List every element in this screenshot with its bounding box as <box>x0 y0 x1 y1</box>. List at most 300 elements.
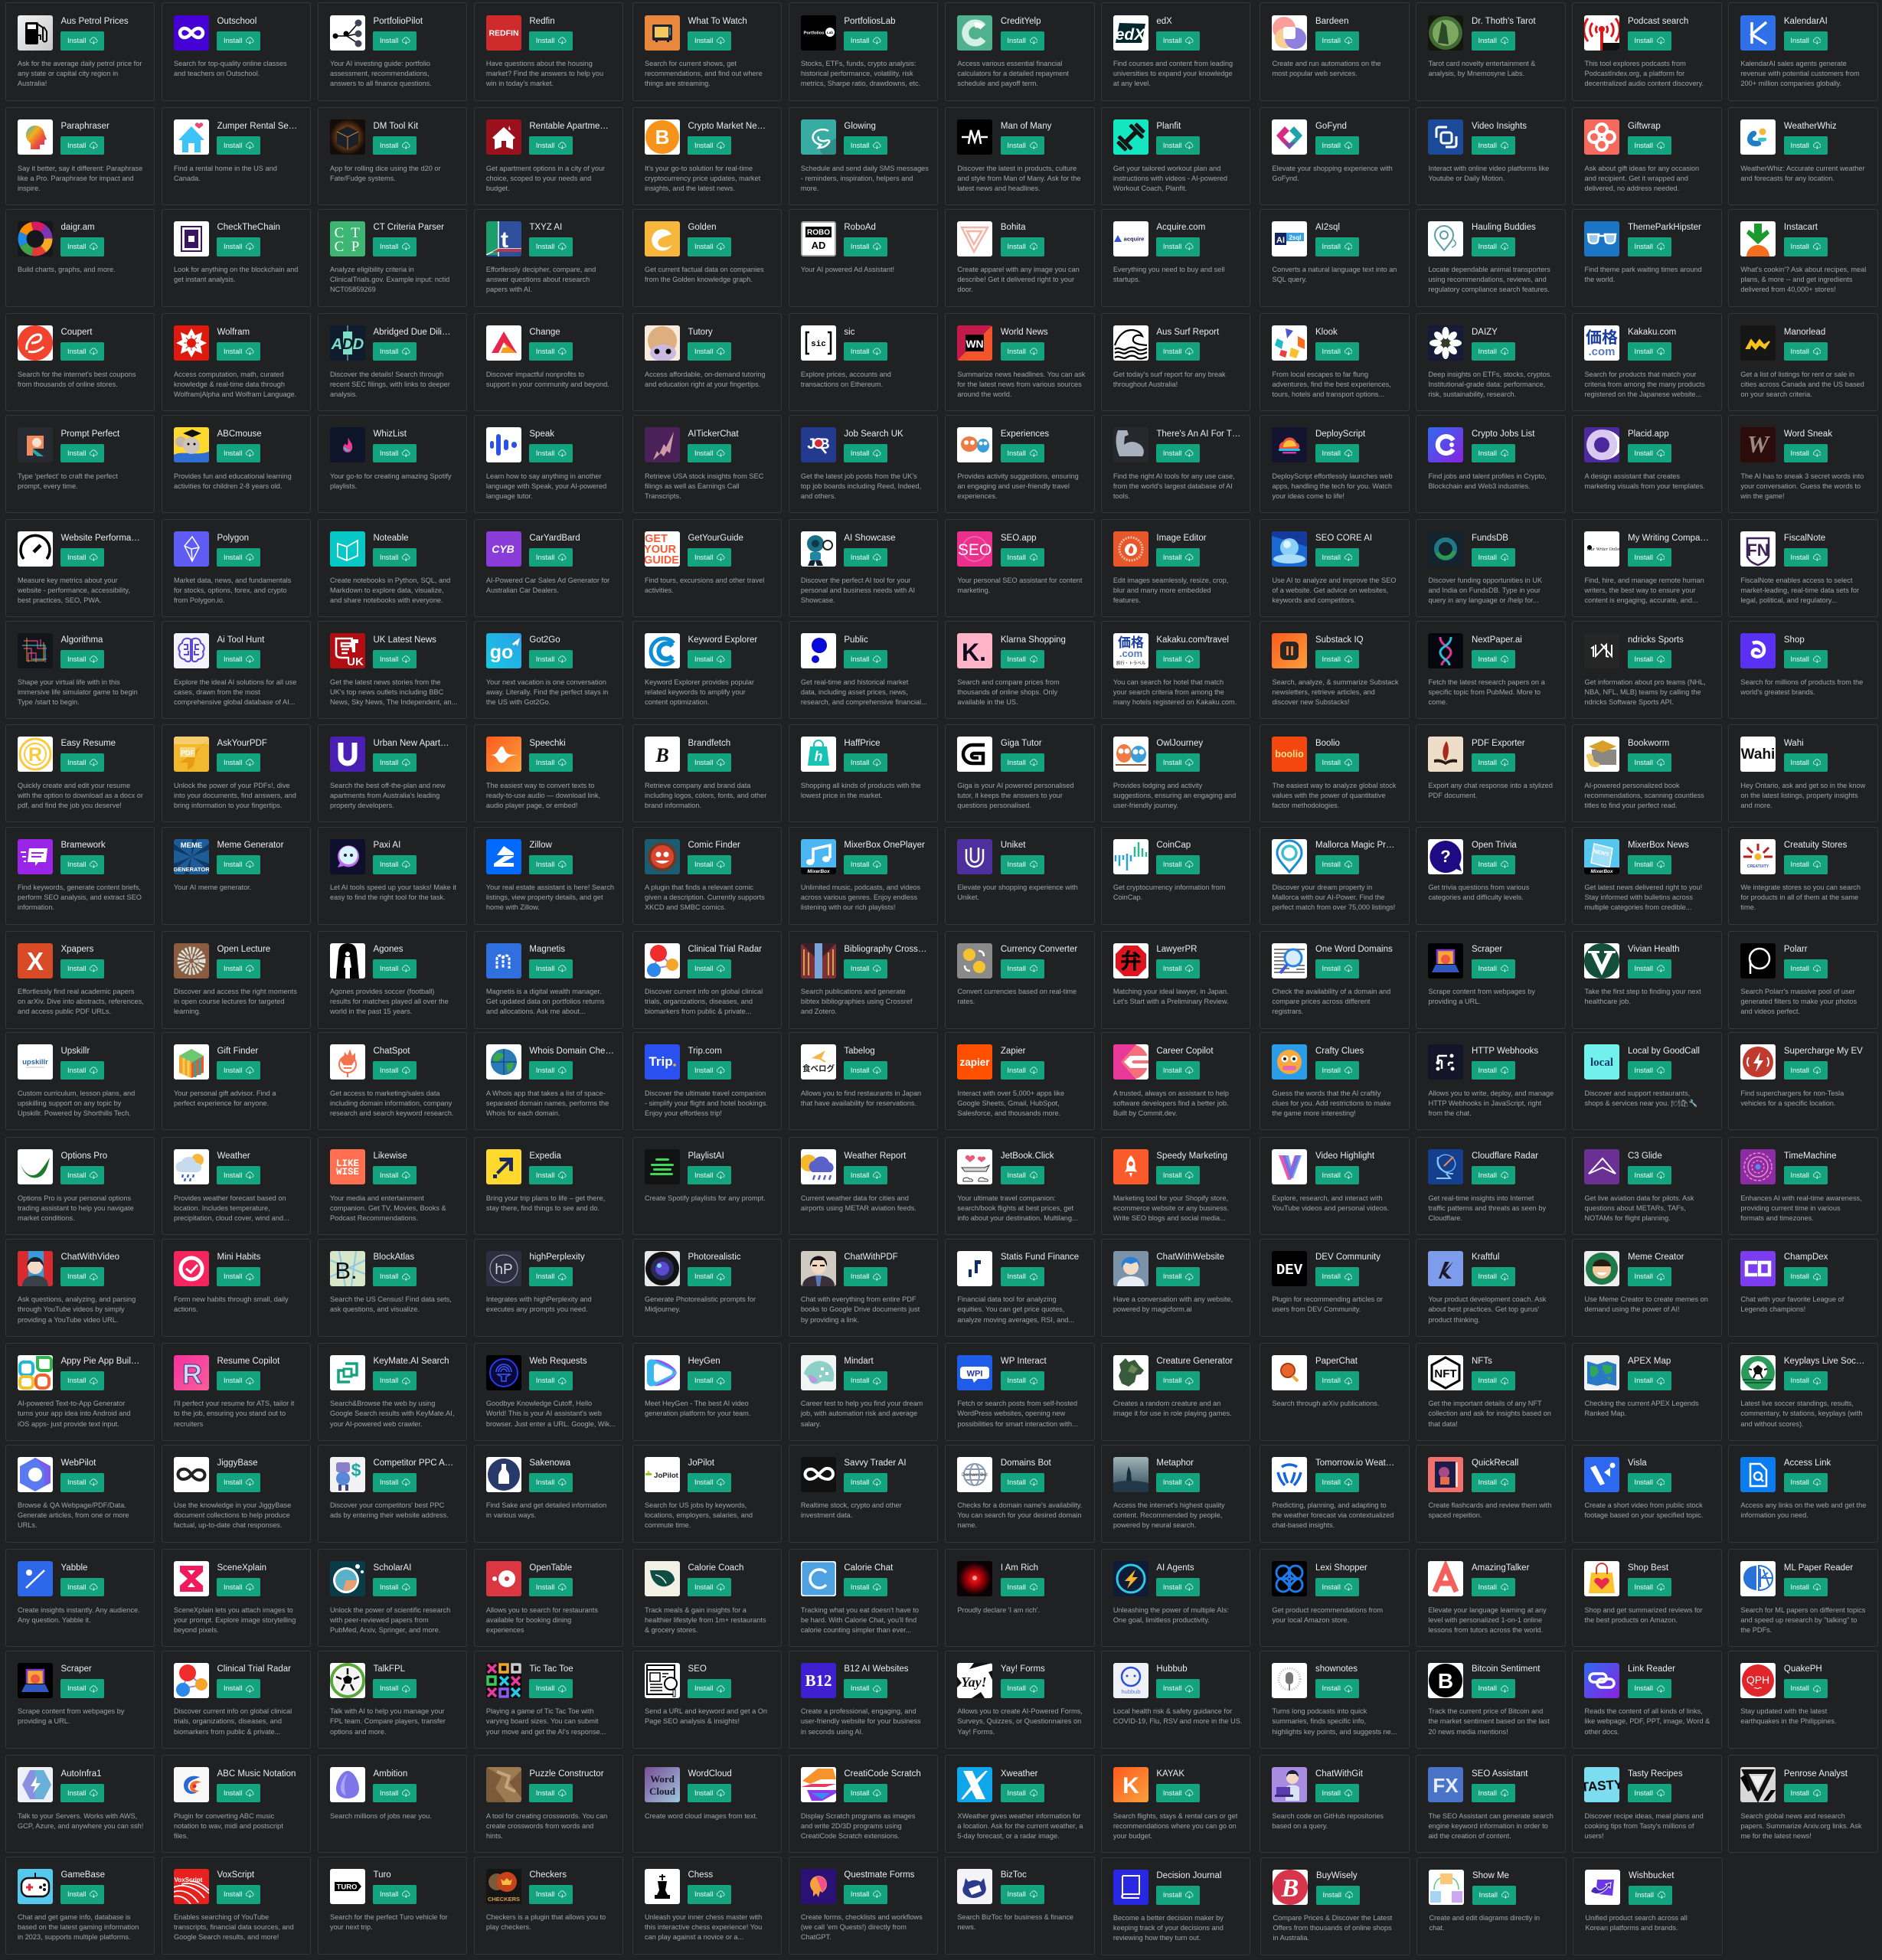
install button: Install <box>380 242 398 250</box>
description <box>801 164 929 192</box>
description <box>1428 472 1547 492</box>
icon: Ai Tool Hunt <box>174 633 209 668</box>
install button: Install <box>536 1583 554 1591</box>
description: listening with our rich playlists! <box>801 903 895 911</box>
icon: Access Link <box>1740 1457 1776 1492</box>
card: Gift Finder <box>162 1032 311 1130</box>
description: Your media and entertainment <box>330 1194 424 1202</box>
icon: Hubbub <box>1113 1663 1148 1698</box>
description: Blockchain and Web3 industries. <box>1428 482 1531 490</box>
name: Klarna Shopping <box>1001 635 1066 645</box>
description: Reads the content of all kinds of links, <box>1584 1707 1703 1715</box>
icon: Kakaku.com: .com <box>1589 345 1616 358</box>
description: Discover and access the right moments <box>174 988 297 995</box>
install button: Install <box>1478 553 1497 561</box>
icon: KalendarAI <box>1740 15 1776 51</box>
install button: Install <box>1634 1583 1653 1591</box>
install button <box>373 31 417 51</box>
description: Generate articles, from one or more <box>18 1511 129 1519</box>
name: Web Requests <box>529 1357 587 1366</box>
card: DeployScript <box>1260 415 1410 513</box>
card: Trip.com <box>632 1032 782 1130</box>
description <box>645 60 763 87</box>
install button <box>1156 1371 1200 1390</box>
icon: Questmate Forms <box>801 1869 836 1904</box>
install button: Install <box>1478 1376 1497 1384</box>
name: Hubbub <box>1156 1664 1188 1674</box>
description: Find tours, excursions and other travel <box>645 576 764 583</box>
description: Custom curriculum, lesson plans, and <box>18 1089 135 1096</box>
description: earthquakes in the Philippines. <box>1740 1717 1837 1725</box>
card: Show Me <box>1416 1857 1567 1955</box>
card: ChampDex <box>1728 1239 1878 1337</box>
install button <box>1784 548 1828 567</box>
description: pdf, and find the job you deserve! <box>18 802 122 809</box>
icon: Open Lecture <box>174 943 209 978</box>
description: of a website. Get advice on websites, <box>1272 586 1388 594</box>
card: Podcast search <box>1572 2 1722 101</box>
name: CreatiCode Scratch <box>844 1769 921 1779</box>
description: World! This is your AI assistant's web <box>486 1410 602 1417</box>
icon: RoboAd: AD <box>811 240 825 251</box>
icon: Klarna Shopping <box>957 633 992 668</box>
description <box>957 369 1085 400</box>
description: Get the latest news stories from the <box>330 678 441 686</box>
name: Domains Bot <box>1001 1459 1051 1468</box>
description: traffic patterns and threats as seen by <box>1428 1204 1546 1212</box>
icon: Sakenowa <box>486 1457 521 1492</box>
description <box>1584 60 1704 87</box>
description: Chat and get game info, database is <box>18 1913 131 1921</box>
description: the PDFs. <box>1740 1626 1772 1634</box>
icon: Manorlead <box>1740 325 1776 361</box>
description: and Zotero. <box>801 1008 837 1015</box>
icon: Link Reader <box>1584 1663 1619 1698</box>
description: spaced repeition. <box>1428 1511 1482 1519</box>
description: Access various essential financial <box>957 60 1062 67</box>
description <box>18 1399 131 1429</box>
card: HTTP Webhooks <box>1416 1032 1566 1130</box>
card: Photorealistic <box>632 1239 782 1337</box>
description: CreatiCode Scratch extensions. <box>801 1832 900 1840</box>
install button <box>1315 342 1359 361</box>
description: analysis. <box>330 390 358 398</box>
icon: BlockAtlas <box>330 1251 365 1286</box>
icon: Mini Habits <box>174 1251 209 1286</box>
icon: QuakePH <box>1740 1663 1776 1698</box>
description <box>1428 781 1553 801</box>
install button <box>1472 136 1515 155</box>
name: UK Latest News <box>373 635 436 645</box>
description: and videos perfect. <box>1740 1008 1800 1015</box>
card: SEO <box>632 1651 782 1749</box>
install button <box>844 136 887 155</box>
description: historical performance, volatility, risk <box>801 70 913 77</box>
card: Public <box>789 621 938 719</box>
install button: Install <box>694 1788 713 1797</box>
description <box>1428 677 1545 707</box>
description: perform SEO analysis, and extract SEO <box>18 893 142 901</box>
description: Canada. <box>174 175 201 182</box>
install button: Install <box>536 36 554 44</box>
icon: highPerplexity <box>486 1251 521 1286</box>
install button <box>373 136 417 155</box>
name: daigr.am <box>60 223 95 232</box>
name: Yay! Forms <box>1001 1664 1045 1674</box>
icon: CoinCap <box>1113 839 1148 874</box>
install button: Install <box>1322 964 1341 972</box>
install button <box>688 855 731 874</box>
card: AmazingTalker <box>1416 1549 1566 1647</box>
install button: Install <box>1790 1478 1809 1486</box>
description: One goal, limitless productivity. <box>1113 1616 1210 1624</box>
description: Your AI investing guide: portfolio <box>330 60 430 67</box>
card: Weather <box>162 1137 311 1235</box>
description: and speed up research by "talking" to <box>1740 1616 1857 1624</box>
description: your budget. <box>1113 1832 1152 1840</box>
install button: Install <box>1634 1684 1653 1692</box>
description: Your next vacation is one conversation <box>486 678 606 686</box>
description <box>18 369 136 390</box>
name: Podcast search <box>1628 17 1688 26</box>
install button: Install <box>67 758 86 766</box>
install button <box>1628 1371 1671 1390</box>
description: Get information about pro teams (NHL, <box>1584 678 1706 686</box>
card: Visla <box>1572 1444 1722 1543</box>
install button: Install <box>851 141 869 149</box>
icon: Gift Finder <box>174 1044 209 1080</box>
install button: Install <box>1634 449 1653 457</box>
description <box>1113 987 1229 1007</box>
name: Sakenowa <box>529 1459 570 1468</box>
icon: Calorie Chat <box>801 1561 836 1596</box>
install button: Install <box>1478 758 1497 766</box>
install button: Install <box>224 141 242 149</box>
description: image it for use in role playing games. <box>1113 1410 1232 1417</box>
install button: Install <box>1322 553 1341 561</box>
description: using recommendations, reviews, and <box>1428 276 1547 283</box>
description: best practices, SEO, PWA. <box>18 596 101 604</box>
card: Hubbub <box>1101 1651 1250 1749</box>
install button <box>1628 753 1671 772</box>
icon: Yay! Forms: Yay! <box>962 1674 987 1690</box>
icon: PortfoliosLab: Lab <box>827 31 833 34</box>
install button: Install <box>851 242 869 250</box>
icon: Tabelog: 食べログ <box>802 1063 835 1073</box>
description: given a description. Currently supports <box>645 893 765 901</box>
description: You can search for hotel that match <box>1113 678 1224 686</box>
card: Competitor PPC Ads <box>318 1444 467 1543</box>
description: FiscalNote enables access to select <box>1740 576 1852 583</box>
name: Algorithma <box>60 635 103 645</box>
install button: Install <box>694 347 713 355</box>
install button <box>688 1578 731 1596</box>
install button: Install <box>1790 1376 1809 1384</box>
install button <box>1784 1578 1828 1596</box>
icon: Checkers: CHECKERS <box>488 1896 520 1903</box>
description: describe! Get it delivered right to your <box>957 276 1074 283</box>
description: Enjoy your effortless trip! <box>645 1109 722 1117</box>
install button: Install <box>1163 1272 1181 1280</box>
install button <box>1156 237 1200 256</box>
description: content. Recommended by people, <box>1113 1511 1222 1519</box>
description: Provides weather forecast based on <box>174 1194 286 1202</box>
description: Find keywords, generate content briefs, <box>18 884 141 891</box>
description: language with Speak, your AI-powered <box>486 482 606 490</box>
install button <box>529 1166 573 1184</box>
icon: Scraper <box>1428 943 1463 978</box>
icon: Instacart <box>1740 221 1776 256</box>
name: Dr. Thoth's Tarot <box>1472 17 1536 26</box>
description: Let AI tools speed up your tasks! Make it <box>330 884 456 891</box>
name: Chess <box>688 1870 713 1880</box>
name: AI Showcase <box>844 534 896 543</box>
description <box>174 1501 291 1530</box>
description: beyond pixels. <box>174 1626 219 1634</box>
description: including domain information, company <box>330 1099 452 1107</box>
install button <box>60 342 104 361</box>
description <box>18 1295 136 1325</box>
card: Speedy Marketing <box>1101 1137 1250 1235</box>
description <box>1740 1811 1862 1841</box>
install button: Install <box>1790 242 1809 250</box>
description <box>1584 265 1702 285</box>
description: Search BizToc for business & finance <box>957 1913 1073 1921</box>
icon: Domains Bot <box>957 1457 992 1492</box>
description: Discover impactful nonprofits to <box>486 371 584 378</box>
description: Convert currencies based on real-time <box>957 988 1077 995</box>
description: Create forms, checklists and workflows <box>801 1913 923 1921</box>
description: Salesforce, and thousands more. <box>957 1109 1060 1117</box>
install button <box>373 1267 417 1286</box>
name: Website Performa… <box>60 534 140 543</box>
icon: Statis Fund Finance <box>957 1251 992 1286</box>
name: Rentable Apartme… <box>529 122 609 131</box>
description: Type /start to begin. <box>18 698 80 706</box>
icon: JoPilot <box>645 1457 680 1492</box>
name: Scraper <box>1472 945 1502 954</box>
name: My Writing Compa… <box>1628 534 1709 543</box>
icon: MixerBox News <box>1584 839 1619 874</box>
description <box>1272 1089 1391 1119</box>
description: Surveys, Quizzes, or Questionnaires on <box>957 1717 1081 1725</box>
description <box>486 1605 598 1635</box>
description: market? Find the answers to help you <box>486 70 603 77</box>
card: Bardeen <box>1260 2 1410 101</box>
description: chat-based insights. <box>1272 1521 1335 1529</box>
card: TimeMachine <box>1728 1137 1878 1235</box>
description: your prompt. Explore image storytelling <box>174 1616 296 1624</box>
install button: Install <box>1007 449 1026 457</box>
name: Ambition <box>373 1769 407 1779</box>
card: RoboAd <box>789 209 938 307</box>
description <box>174 576 291 606</box>
install button <box>217 1267 260 1286</box>
install button: Install <box>851 1171 869 1179</box>
install button: Install <box>1634 242 1653 250</box>
card: JetBook.Click <box>945 1137 1095 1235</box>
name: Competitor PPC A… <box>373 1459 453 1468</box>
description: come. <box>1428 698 1448 706</box>
install button: Install <box>1478 347 1497 355</box>
icon: Puzzle Constructor <box>486 1767 521 1802</box>
install button: Install <box>536 242 554 250</box>
description: Access affordable, on-demand tutoring <box>645 371 766 378</box>
install button: Install <box>851 1788 869 1797</box>
icon: Shop Best <box>1584 1561 1619 1596</box>
install button <box>1628 444 1671 462</box>
name: Job Search UK <box>844 430 903 439</box>
description: play checkers. <box>486 1923 531 1931</box>
description <box>1113 164 1227 192</box>
install button <box>217 1371 260 1390</box>
description: Create word cloud images from text. <box>645 1811 758 1819</box>
install button <box>60 1578 104 1596</box>
description: Export any chat response into a stylized <box>1428 781 1553 789</box>
description: Search millions of jobs near you. <box>330 1811 432 1819</box>
description <box>1584 987 1701 1007</box>
icon: Kakaku.com/travel: 価格 <box>1118 635 1144 650</box>
card: Abridged Due Diligence <box>318 313 467 411</box>
icon: Polygon <box>174 531 209 567</box>
card: Appy Pie App Builder <box>5 1343 155 1441</box>
description: Quickly create and edit your resume <box>18 781 130 789</box>
card: GameBase <box>5 1857 155 1955</box>
install button: Install <box>851 347 869 355</box>
card: Placid.app <box>1572 415 1722 513</box>
name: Metaphor <box>1156 1459 1194 1468</box>
name: Public <box>844 635 868 645</box>
description: rates. <box>957 998 975 1005</box>
name: ABCmouse <box>217 430 262 439</box>
description: AI-powered personalized book <box>1584 781 1680 789</box>
install button <box>1784 1061 1828 1080</box>
description <box>330 164 441 182</box>
description <box>174 1605 296 1635</box>
card: Website Performance <box>5 519 155 617</box>
description: Search for current shows, get <box>645 60 737 67</box>
description: Shape your virtual life with in this <box>18 678 120 686</box>
description: time. <box>1740 903 1756 911</box>
icon: Bookworm <box>1584 737 1619 772</box>
description <box>174 987 297 1018</box>
name: AskYourPDF <box>217 739 267 748</box>
install button: Install <box>851 860 869 868</box>
install button: Install <box>1790 1171 1809 1179</box>
icon: Supercharge My EV <box>1740 1044 1776 1080</box>
description: Search for products that match your <box>1584 371 1697 378</box>
card: CreatiCode Scratch <box>789 1755 938 1853</box>
icon: Website Performance <box>18 531 53 567</box>
description <box>645 472 763 501</box>
description: PubMed, Arxiv, Springer, and more. <box>330 1626 440 1634</box>
card: Web Requests <box>474 1343 623 1441</box>
icon: ML Paper Reader <box>1740 1561 1776 1596</box>
install button <box>688 1679 731 1698</box>
install button <box>217 1679 260 1698</box>
card: ChatWithVideo <box>5 1239 155 1337</box>
icon: Speechki <box>486 737 521 772</box>
install button <box>1315 1061 1359 1080</box>
name: SEO Assistant <box>1472 1769 1528 1779</box>
description: Have questions about the housing <box>486 60 593 67</box>
install button: Install <box>380 1890 398 1898</box>
description <box>486 883 614 913</box>
description: reviewing how they turn out. <box>1113 1934 1201 1942</box>
icon: Turo: TURO <box>337 1883 357 1891</box>
description: summaries, finds specific info, <box>1272 1717 1366 1725</box>
card: Meme Creator <box>1572 1239 1722 1337</box>
description: hints. <box>486 1832 503 1840</box>
icon: I Am Rich <box>957 1561 992 1596</box>
icon: SEO.app: SEO <box>958 541 992 559</box>
description: Get live aviation data for pilots. Ask <box>1584 1194 1694 1202</box>
card: AskYourPDF <box>162 724 311 822</box>
description: that have availability for reservations. <box>801 1099 916 1107</box>
description <box>486 1399 616 1429</box>
description: for products in all of them at the same <box>1740 893 1858 901</box>
description <box>1113 883 1225 903</box>
name: KAYAK <box>1156 1769 1184 1779</box>
description <box>645 987 763 1018</box>
name: Video Insights <box>1472 122 1527 131</box>
icon: Easy Resume: R <box>28 744 42 766</box>
install button <box>1784 1473 1828 1492</box>
card: World News <box>945 313 1095 411</box>
description: iOS apps- just provide text input. <box>18 1420 119 1428</box>
install button <box>529 1679 573 1698</box>
description <box>957 472 1079 501</box>
install button <box>1315 237 1359 256</box>
install button: Install <box>1634 1376 1653 1384</box>
name: C3 Glide <box>1628 1152 1662 1161</box>
install button <box>1472 1371 1515 1390</box>
description: actions. <box>174 1305 198 1313</box>
icon: VoxScript: VoxScript <box>175 1877 203 1883</box>
card: Hauling Buddies <box>1416 209 1566 307</box>
install button <box>1628 136 1671 155</box>
install button <box>1472 1784 1515 1802</box>
install button <box>1315 444 1359 462</box>
install button <box>1628 650 1671 668</box>
name: DAIZY <box>1472 328 1498 337</box>
name: Man of Many <box>1001 122 1051 131</box>
install button <box>844 855 887 874</box>
icon: CreditYelp <box>957 15 992 51</box>
card: Experiences <box>945 415 1095 513</box>
name: Giftwrap <box>1628 122 1661 131</box>
icon: Kakaku.com <box>1584 325 1619 361</box>
icon: ChatWithWebsite <box>1113 1251 1148 1286</box>
install button: Install <box>1007 36 1026 44</box>
card: Change <box>474 313 623 411</box>
card: Expedia <box>474 1137 623 1235</box>
icon: Likewise: LIKE <box>336 1158 359 1169</box>
name: Crypto Market Ne… <box>688 122 766 131</box>
description: Integrates with highPerplexity and <box>486 1295 592 1303</box>
description: inspire. <box>18 185 41 192</box>
description: Ask about gift ideas for any occasion <box>1584 164 1699 172</box>
description <box>1429 1913 1540 1933</box>
name: OpenTable <box>529 1563 572 1573</box>
icon: Abridged Due Diligence <box>330 325 365 361</box>
card: Vivian Health <box>1572 931 1722 1029</box>
description: Let's Start with a Preliminary Review. <box>1113 998 1229 1005</box>
install button <box>1315 1679 1359 1698</box>
description: and without scores). <box>1740 1420 1804 1428</box>
name: PDF Exporter <box>1472 739 1525 748</box>
icon: BizToc <box>957 1869 992 1904</box>
